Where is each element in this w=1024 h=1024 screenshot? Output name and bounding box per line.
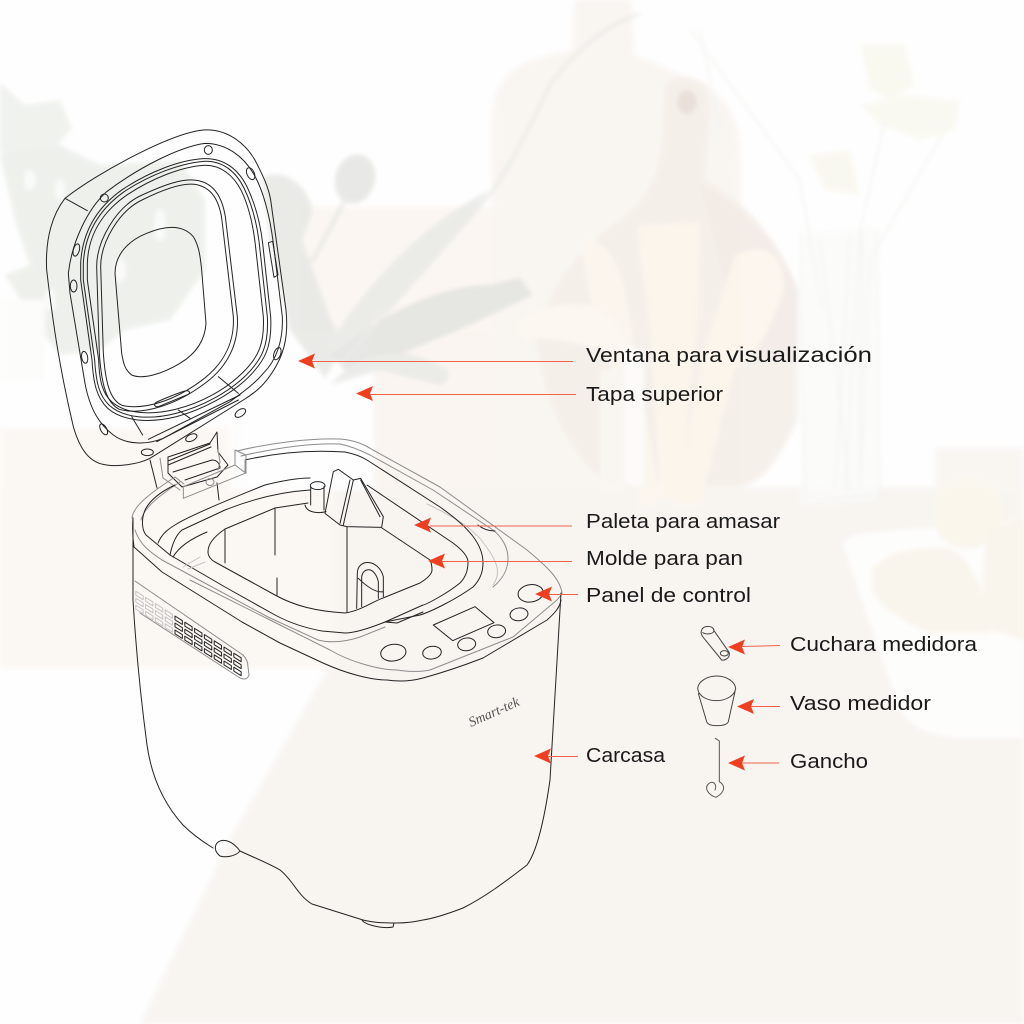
callout: Tapa superior: Tapa superior [586,384,723,406]
callout: Panel de control: Panel de control [586,585,751,607]
callout: Carcasa: Carcasa [586,745,666,767]
dark ring C [170,490,310,557]
snake plant [262,174,345,378]
bread pan opening [208,503,432,613]
monstera plant [0,83,72,185]
outer dark front edge [133,518,561,681]
callout: Ventana para visualizacion: visualización [726,344,872,367]
callout: Vaso medidor [737,693,931,715]
callout: Cuchara medidora: Cuchara medidora [790,634,978,656]
dark ring B [158,478,468,622]
body housing [133,518,561,928]
brand logo: Smart-tek [467,695,523,731]
icon: measuring spoon [701,626,729,660]
callout: Cuchara medidora [728,634,978,656]
lid ribs and screw holes [65,198,238,435]
lid gasket ring [68,143,282,443]
bread machine illustration [46,130,562,928]
callout: Ventana para visualizacion [298,344,872,368]
wooden utensils [582,240,660,510]
callout: Molde para pan: Molde para pan [586,548,743,570]
callout: Paleta para amasar [414,511,780,533]
pan handle [357,562,383,608]
lid [46,130,287,466]
callout: Panel de control [535,585,751,607]
window seal rings [81,159,271,420]
ventilation slots [135,581,249,679]
lid hinge [150,432,228,500]
icon: measuring cup [698,676,736,726]
outer thin silhouette [132,439,562,593]
inner window frame [97,180,237,411]
centre viewing panel [115,227,206,377]
lid outer edge [46,130,287,466]
front thin rim lines [135,530,562,672]
kneading paddle [305,469,383,527]
dark ring A [142,451,483,633]
callout: Ventana para visualizacion: Ventana para [586,345,723,367]
callout: Vaso medidor: Vaso medidor [790,693,931,715]
second thin rim line [141,444,508,587]
control panel [380,583,544,663]
dried flowers [860,45,915,100]
accessories [698,626,736,797]
base hinge recess [183,450,246,498]
callout: Carcasa [534,745,666,767]
icon: hook [707,738,724,797]
base rim [132,439,562,681]
callout: Tapa superior [356,384,723,406]
callout: Molde para pan [428,548,743,570]
round cutting board [536,78,798,486]
white pots [0,378,135,428]
callout: Gancho [728,751,868,773]
callout: Paleta para amasar: Paleta para amasar [586,511,780,533]
glass vase [800,228,882,505]
callout: Gancho: Gancho [790,751,868,773]
white dish with potatoes [843,520,1024,738]
